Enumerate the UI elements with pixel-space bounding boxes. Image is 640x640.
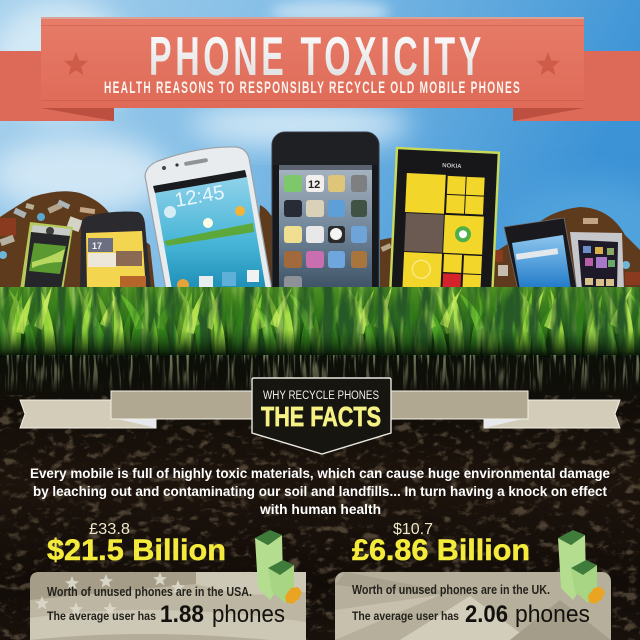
main ribbon panel (41, 17, 584, 108)
phone: black Motorola Android (80, 212, 151, 290)
icon: right star (536, 52, 560, 75)
main value: £6.86 Billion (352, 534, 530, 567)
stat: USA (30, 521, 306, 640)
card with British flag (335, 572, 611, 640)
stat: UK (335, 521, 611, 640)
phone: yellow Nokia Lumia (390, 148, 499, 299)
phone: black Motorola Android: 17 (92, 241, 102, 251)
phone: AT&T Android (504, 218, 577, 290)
icon: left star (64, 52, 88, 75)
intro paragraph: Every mobile is full of highly toxic materials, which can cause huge environmental damage (30, 465, 610, 481)
card text line 2: The average user has (352, 609, 459, 623)
right ribbon tail (484, 400, 620, 428)
app icons grid (284, 175, 367, 290)
converted value: £33.8 (89, 521, 130, 538)
card text line 1: Worth of unused phones are in the USA. (47, 585, 252, 599)
left ribbon tail (20, 400, 156, 428)
phone: Motorola with lime frame (20, 222, 73, 290)
icon: money stacks and coins (255, 530, 302, 604)
fold right (484, 419, 522, 428)
phone: white Samsung Galaxy (145, 147, 272, 291)
left rubbish mound (0, 191, 276, 290)
left ribbon front (111, 391, 256, 419)
phone: white Samsung Galaxy: 12:45 (173, 182, 226, 212)
intro paragraph (30, 465, 610, 517)
phone: silver Nokia N-series (570, 232, 624, 290)
phones word: phones (515, 601, 590, 628)
soil background (0, 352, 640, 640)
icon: money stacks and coins (558, 530, 605, 604)
phone count: 1.88 (160, 601, 204, 628)
fold left (118, 419, 156, 428)
phone: yellow Nokia Lumia: NOKIA (442, 163, 462, 170)
right ribbon front (385, 391, 528, 419)
main value: $21.5 Billion (47, 534, 226, 567)
intro paragraph: with human health (259, 501, 381, 517)
converted value: $10.7 (393, 521, 433, 538)
phone: iPhone (272, 132, 379, 307)
banner: the facts (20, 378, 620, 454)
card text line 1: Worth of unused phones are in the UK. (352, 583, 550, 597)
card text line 2: The average user has (47, 609, 156, 623)
phone count: 2.06 (465, 601, 508, 628)
phones word: phones (212, 601, 285, 628)
right rubbish mound (380, 207, 640, 290)
right ribbon tail (513, 51, 640, 121)
grass (0, 286, 640, 358)
banner main heading: THE FACTS (261, 401, 381, 432)
title ribbon (0, 17, 640, 121)
intro paragraph: by leaching out and contaminating our soil and landfills... In turn having a knock on effect (33, 483, 607, 499)
left ribbon tail (0, 51, 114, 121)
app icons grid: 12 (308, 179, 320, 191)
background: blue sky with clouds (0, 0, 640, 300)
card with American flag (30, 572, 306, 640)
banner small heading: WHY RECYCLE PHONES (263, 390, 379, 402)
roots (0, 355, 640, 393)
shield (252, 378, 391, 454)
